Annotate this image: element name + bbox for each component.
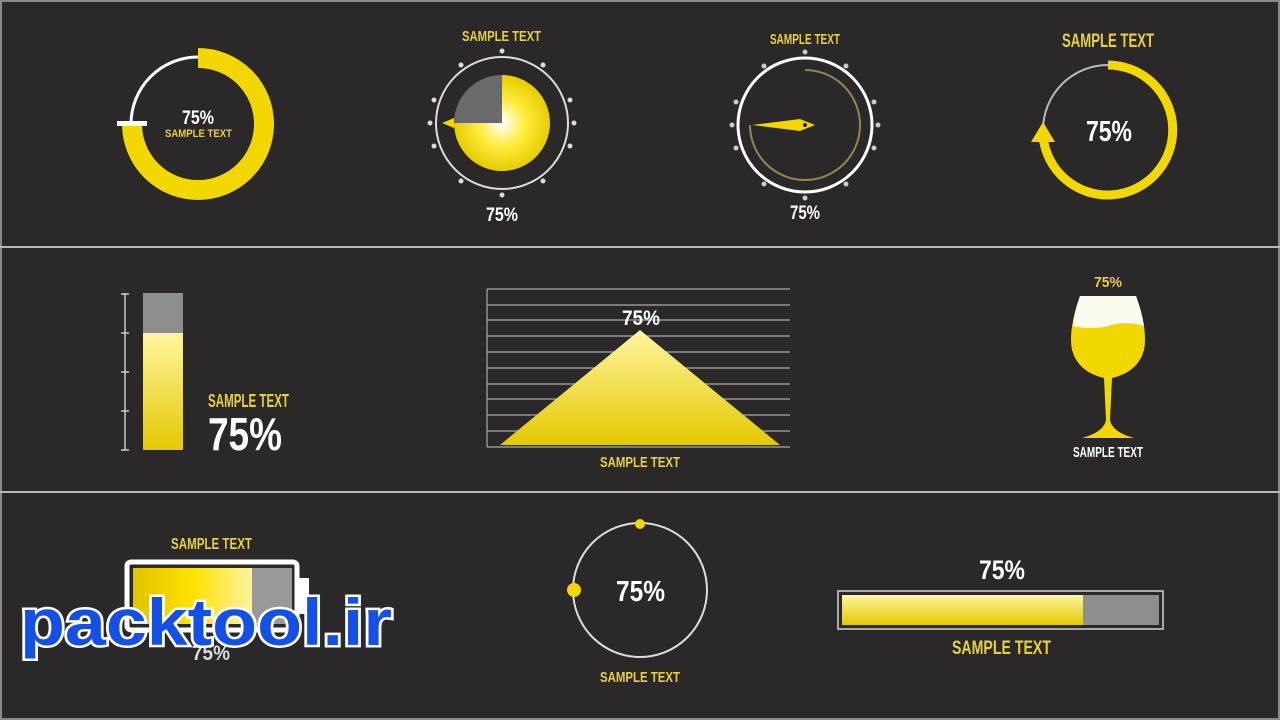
panel: triangle chart: SAMPLE TEXT	[600, 454, 680, 471]
panel: dot circle	[567, 519, 707, 686]
panel: circular arrow: 75%	[1086, 116, 1132, 148]
panel: wine glass: 75%	[1094, 274, 1122, 291]
panel: ring progress: SAMPLE TEXT	[165, 128, 232, 140]
panel: battery: 75%	[192, 642, 230, 665]
watermark: packtool.ir	[20, 585, 392, 659]
panel: circular arrow: SAMPLE TEXT	[1062, 31, 1154, 52]
panel: vertical bar: SAMPLE TEXT	[208, 391, 289, 411]
panel: wine glass: SAMPLE TEXT	[1073, 444, 1143, 461]
panel: circular arrow	[1031, 31, 1173, 195]
panel: triangle chart	[487, 289, 790, 471]
panel: progress bar: SAMPLE TEXT	[952, 638, 1051, 659]
panel: ring progress: 75%	[182, 108, 214, 129]
panel: triangle chart: 75%	[622, 307, 660, 330]
panel: progress bar: 75%	[979, 555, 1025, 585]
panel: dot circle: 75%	[616, 576, 665, 608]
panel: wine glass	[1071, 274, 1145, 461]
panel: ring progress	[117, 57, 264, 190]
panel: battery: SAMPLE TEXT	[171, 536, 252, 553]
panel: battery	[127, 536, 309, 665]
panel: pie dial: 75%	[486, 205, 518, 226]
panel: vertical bar	[121, 293, 289, 460]
panel: gauge: SAMPLE TEXT	[770, 31, 840, 48]
panel: vertical bar: 75%	[208, 408, 282, 460]
needle	[752, 119, 815, 131]
panel: gauge	[730, 31, 880, 224]
thin white arc	[131, 57, 198, 124]
panel: progress bar	[838, 555, 1163, 659]
panel: pie dial	[428, 28, 576, 226]
yellow arc	[132, 58, 264, 190]
panel: gauge: 75%	[790, 203, 820, 224]
panel: dot circle: SAMPLE TEXT	[600, 669, 680, 686]
panel: pie dial: SAMPLE TEXT	[462, 28, 541, 45]
